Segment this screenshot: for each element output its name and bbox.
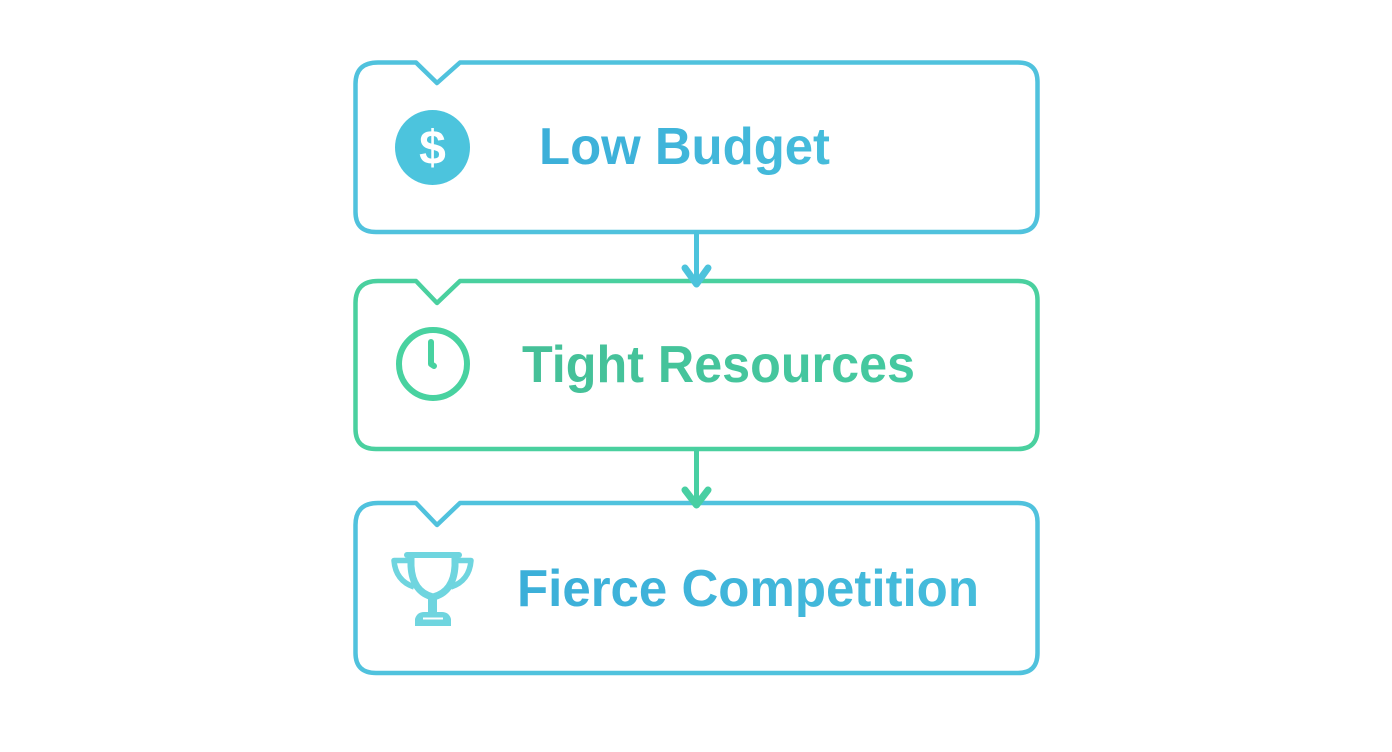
panel: fierce competition [356,503,1038,673]
panel: low budget [356,62,1038,232]
arrow: low budget to tight resources [685,233,708,284]
icon: dollar coin: $ [419,122,446,175]
icon: clock [399,330,467,398]
heading: low budget: Low Budget [539,118,830,176]
icon: trophy [394,555,471,626]
heading: tight resources: Tight Resources [522,336,915,394]
card outline: fierce competition [356,503,1038,673]
heading: fierce competition: Fierce Competition [517,560,979,618]
arrow: tight resources to fierce competition [685,450,708,505]
panel: tight resources [356,281,1038,449]
icon: dollar coin [395,110,470,185]
card outline: low budget [356,62,1038,232]
card outline: tight resources [356,281,1038,449]
